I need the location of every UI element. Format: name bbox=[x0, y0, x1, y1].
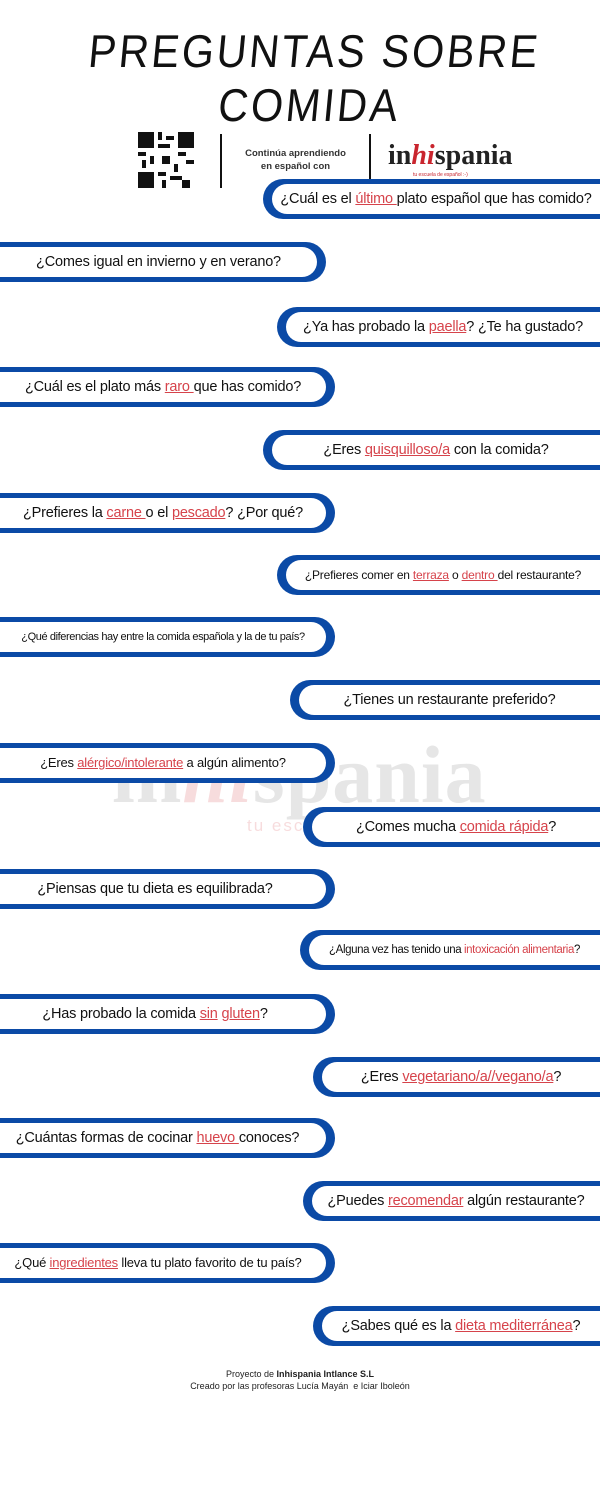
q17 bbox=[303, 1181, 600, 1221]
title bbox=[86, 25, 543, 131]
q18: ¿Qué ingredientes lleva tu plato favorito de tu país? bbox=[14, 1255, 302, 1270]
watermark: tu escuela de español bbox=[247, 816, 454, 835]
q16: ¿Cuántas formas de cocinar huevo conoces? bbox=[16, 1130, 299, 1146]
q1: ¿Cuál es el último plato español que has comido? bbox=[280, 191, 592, 207]
q13: ¿Alguna vez has tenido una intoxicación alimentaria? bbox=[329, 944, 580, 956]
q18 bbox=[0, 1243, 335, 1283]
q19 bbox=[313, 1306, 600, 1346]
tagline bbox=[245, 148, 346, 172]
q3: ¿Ya has probado la paella? ¿Te ha gustado? bbox=[303, 319, 583, 335]
tagline: Continúa aprendiendo bbox=[245, 148, 346, 159]
q14 bbox=[0, 994, 335, 1034]
title: COMIDA bbox=[216, 79, 403, 131]
q10 bbox=[0, 743, 335, 783]
footer credits bbox=[190, 1369, 410, 1391]
q4: ¿Cuál es el plato más raro que has comido? bbox=[25, 379, 301, 395]
title: PREGUNTAS SOBRE bbox=[86, 25, 543, 77]
tagline: en español con bbox=[261, 161, 330, 172]
q10: ¿Eres alérgico/intolerante a algún alimento? bbox=[40, 755, 286, 770]
q7: ¿Prefieres comer en terraza o dentro del restaurante? bbox=[305, 568, 581, 582]
q17: ¿Puedes recomendar algún restaurante? bbox=[328, 1193, 584, 1209]
q3 bbox=[277, 307, 600, 347]
q5: ¿Eres quisquilloso/a con la comida? bbox=[323, 442, 549, 458]
q12: ¿Piensas que tu dieta es equilibrada? bbox=[37, 881, 273, 897]
footer credits: Creado por las profesoras Lucía Mayán e Iciar Iboleón bbox=[190, 1381, 410, 1391]
q15 bbox=[313, 1057, 600, 1097]
q1 bbox=[263, 179, 600, 219]
q8 bbox=[0, 617, 335, 657]
icon: QR code bbox=[138, 132, 194, 188]
q11: ¿Comes mucha comida rápida? bbox=[356, 819, 556, 835]
q9: ¿Tienes un restaurante preferido? bbox=[343, 692, 556, 708]
logo: inhispania bbox=[388, 140, 513, 171]
header: QR code, tagline, logo: tu escuela de español :-) bbox=[413, 172, 468, 178]
q12 bbox=[0, 869, 335, 909]
q2: ¿Comes igual en invierno y en verano? bbox=[36, 254, 281, 270]
q2 bbox=[0, 242, 326, 282]
q5 bbox=[263, 430, 600, 470]
q9 bbox=[290, 680, 600, 720]
q13 bbox=[300, 930, 600, 970]
q4 bbox=[0, 367, 335, 407]
q7 bbox=[277, 555, 600, 595]
watermark: inhispania bbox=[112, 729, 487, 820]
q19: ¿Sabes qué es la dieta mediterránea? bbox=[342, 1318, 580, 1334]
q6 bbox=[0, 493, 335, 533]
q6: ¿Prefieres la carne o el pescado? ¿Por qué? bbox=[23, 505, 303, 521]
header: QR code, tagline, logo bbox=[138, 132, 513, 188]
q15: ¿Eres vegetariano/a//vegano/a? bbox=[361, 1069, 561, 1085]
q8: ¿Qué diferencias hay entre la comida española y la de tu país? bbox=[21, 631, 305, 643]
q14: ¿Has probado la comida sin gluten? bbox=[42, 1006, 268, 1022]
q11 bbox=[303, 807, 600, 847]
footer credits: Proyecto de Inhispania Intlance S.L bbox=[226, 1369, 374, 1379]
q16 bbox=[0, 1118, 335, 1158]
